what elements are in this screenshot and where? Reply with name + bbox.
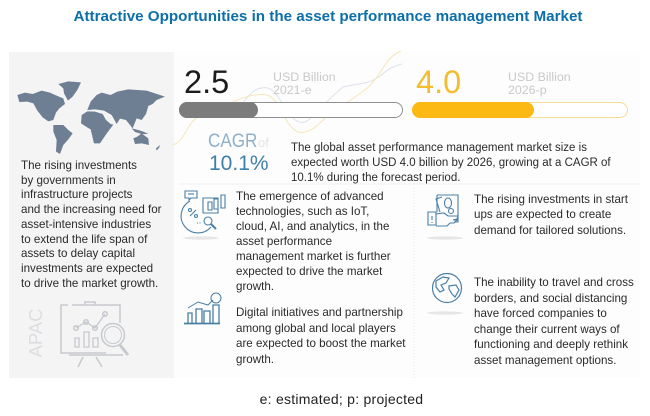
text: travel and borders: The inability to travel and cross xyxy=(474,276,634,289)
bar fill: 2021 xyxy=(179,102,258,118)
progress bar: 2026 xyxy=(412,102,628,118)
footnote: e: estimated; p: projected xyxy=(260,391,423,407)
label: USD Billion 2026-p xyxy=(508,70,571,96)
text: travel and borders: have forced companies to xyxy=(474,307,607,320)
text: advanced technologies xyxy=(236,190,391,293)
text: advanced technologies: management market is further xyxy=(236,250,391,263)
CAGR callout: CAGR xyxy=(208,131,257,152)
text: travel and borders: change their current ways of xyxy=(474,323,620,336)
panel: main background xyxy=(174,52,640,378)
text: start ups xyxy=(474,193,628,237)
text: APAC description xyxy=(21,159,162,290)
text: market summary: expected worth USD 4.0 billion by 2026, growing at a CAGR of xyxy=(291,157,611,169)
CAGR callout xyxy=(208,131,269,175)
text: travel and borders: functioning and deeply rethink xyxy=(474,338,628,351)
progress bar: 2021 xyxy=(179,102,403,118)
label: USD Billion 2026-p: 2026-p xyxy=(508,82,547,96)
text: travel and borders: borders, and social distancing xyxy=(474,292,627,305)
title: Attractive Opportunities in the asset performance management Market xyxy=(74,8,582,25)
text: market summary: 10.1% during the forecast period. xyxy=(291,172,460,184)
text: market summary: The global asset performance management market size is xyxy=(291,142,587,154)
value: 2.5: 2.5 xyxy=(184,64,229,100)
label: APAC: APAC xyxy=(25,308,46,358)
text: digital initiatives: Digital initiatives and partnership xyxy=(236,306,403,319)
text: digital initiatives: are expected to boost the market xyxy=(236,337,406,350)
label: USD Billion 2021-e xyxy=(273,70,336,96)
text: APAC description: to drive the market growth. xyxy=(21,277,158,290)
text: advanced technologies: expected to drive the market xyxy=(236,265,382,278)
text: APAC description: and the increasing need for xyxy=(21,203,162,216)
text: APAC description: assets to delay capital xyxy=(21,247,135,260)
text: digital initiatives xyxy=(236,306,406,366)
text: advanced technologies: growth. xyxy=(236,280,274,293)
label: USD Billion 2021-e: USD Billion xyxy=(273,70,336,84)
CAGR callout: 10.1% xyxy=(209,152,269,175)
panel: APAC xyxy=(9,52,174,378)
value: 4.0: 4.0 xyxy=(416,64,461,100)
text: start ups: ups are expected to create xyxy=(474,208,611,221)
text: APAC description: investments are expected xyxy=(21,262,153,275)
text: advanced technologies: technologies, such as IoT, xyxy=(236,205,369,218)
text: APAC description: The rising investments xyxy=(21,159,137,172)
text: digital initiatives: among global and local players xyxy=(236,322,396,335)
text: digital initiatives: growth. xyxy=(236,353,274,366)
CAGR callout: of xyxy=(258,135,269,150)
text: APAC description: asset-intensive industries xyxy=(21,218,151,231)
text: advanced technologies: asset performance xyxy=(236,235,332,248)
text: market summary xyxy=(291,142,611,184)
label: USD Billion 2026-p: USD Billion xyxy=(508,70,571,84)
label: USD Billion 2021-e: 2021-e xyxy=(273,82,312,96)
bar fill: 2026 xyxy=(412,102,534,118)
text: APAC description: infrastructure projects xyxy=(21,188,132,201)
text: advanced technologies: cloud, AI, and analytics, in the xyxy=(236,220,389,233)
text: start ups: demand for tailored solutions. xyxy=(474,224,626,237)
text: advanced technologies: The emergence of advanced xyxy=(236,190,384,203)
text: start ups: The rising investments in start xyxy=(474,193,628,206)
text: travel and borders xyxy=(474,276,634,367)
text: travel and borders: asset management options. xyxy=(474,354,616,367)
text: APAC description: to extend the life span of xyxy=(21,233,147,246)
text: APAC description: by governments in xyxy=(21,174,116,187)
